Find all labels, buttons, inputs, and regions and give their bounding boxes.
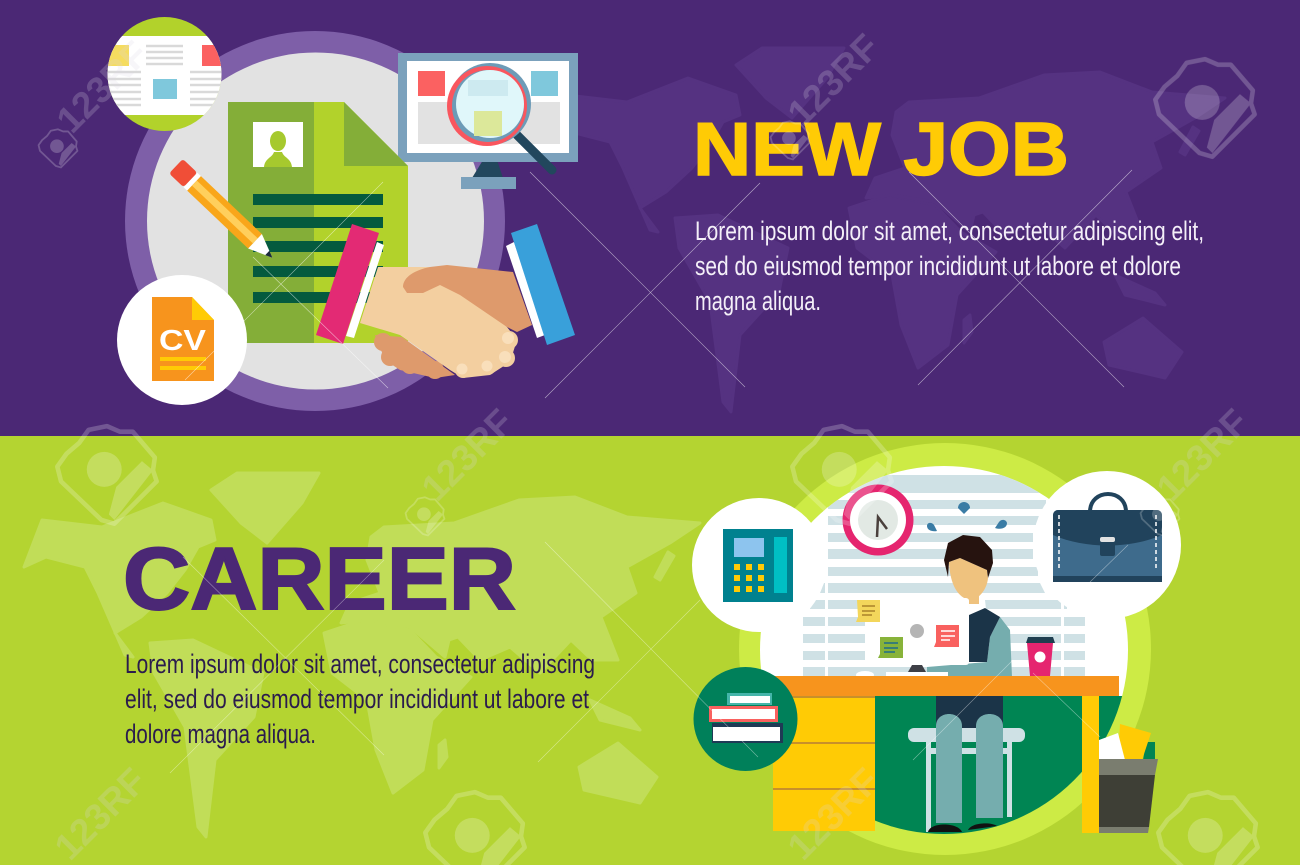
watermark: stock logos and marks: 123RF <box>1149 401 1256 509</box>
text block: career description <box>125 649 595 749</box>
sweat drops <box>927 502 1007 531</box>
large circle ring <box>739 443 1151 855</box>
icon: CV file circle: CV <box>159 325 207 357</box>
world map: new job panel <box>549 48 1225 412</box>
world map: career panel <box>24 473 700 837</box>
text block: new job description <box>695 216 1204 316</box>
heading: career: CAREER <box>123 529 516 628</box>
icon: monitor with magnifier <box>398 53 578 189</box>
chair <box>908 728 1025 832</box>
thin construction lines: career <box>170 542 1128 773</box>
watermark: stock logos and marks: 123RF <box>780 760 887 865</box>
laptop logo dot <box>910 624 924 638</box>
icon: wall clock <box>842 484 914 556</box>
panel: career background <box>0 436 1300 865</box>
heading: new job: NEW JOB <box>693 107 1069 191</box>
large circle ring <box>125 31 505 411</box>
text block: career description: elit, sed do eiusmod tempor incididunt ut labore et <box>125 684 589 714</box>
illustration: career office desk <box>692 443 1181 855</box>
figure: worker upper body <box>927 535 1012 677</box>
figure: worker legs <box>928 696 1003 832</box>
icon: briefcase bubble <box>1033 471 1181 619</box>
watermark: stock logos and marks: 123RF <box>780 26 887 134</box>
large circle interior <box>760 466 1128 836</box>
icon: handshake <box>316 224 575 379</box>
sticky notes <box>856 600 959 658</box>
icon: coffee cup <box>1026 637 1055 676</box>
icon: telephone bubble <box>692 498 826 632</box>
watermark: stock logos and marks: 123RF <box>47 760 154 865</box>
desk <box>773 676 1119 833</box>
large circle interior <box>147 52 484 390</box>
icon: resume document <box>228 102 408 343</box>
icon: CV file circle <box>117 275 247 405</box>
icon: document thumbnail circle <box>107 17 222 131</box>
text block: new job description: magna aliqua. <box>695 286 821 316</box>
thin construction lines: new job <box>185 170 1132 398</box>
watermark: stock logos and marks: 123RF <box>49 33 156 141</box>
illustration: new job handshake and CV <box>107 17 578 411</box>
icon: pencil <box>169 159 279 265</box>
laptop base <box>856 665 948 679</box>
panel: new job background <box>0 0 1300 436</box>
icon: books circle <box>694 667 798 771</box>
text block: career description: dolore magna aliqua. <box>125 719 316 749</box>
laptop <box>865 598 969 665</box>
icon: waste bin with papers <box>1099 724 1158 833</box>
text block: career description: Lorem ipsum dolor sit amet, consectetur adipiscing <box>125 649 595 679</box>
watermark: stock logos and marks: 123RF <box>414 401 521 509</box>
